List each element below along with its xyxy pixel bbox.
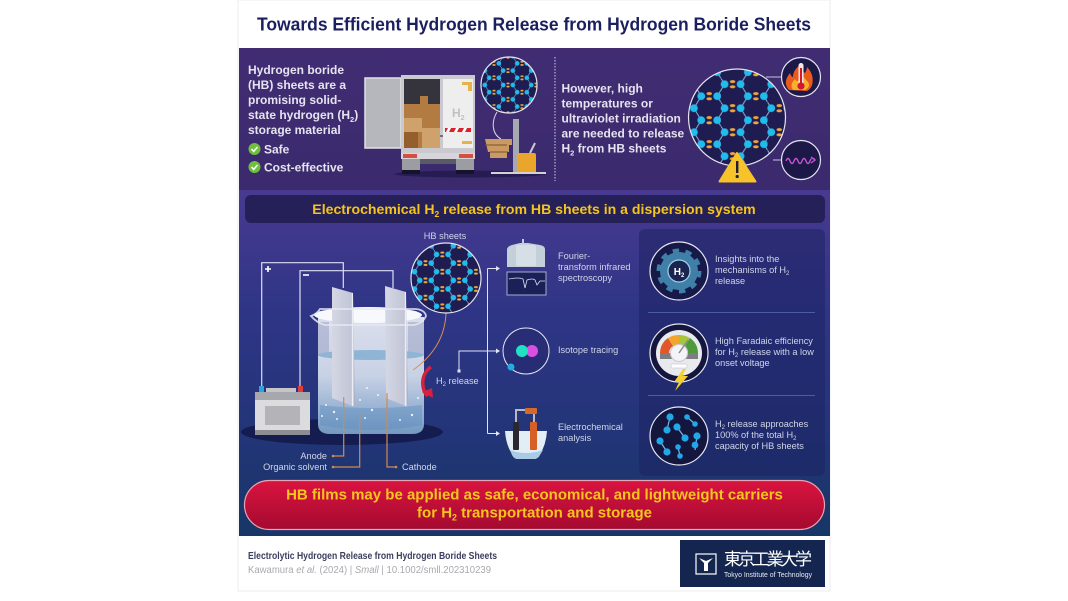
citation: Electrolytic Hydrogen Release from Hydrogen Boride Sheets (248, 551, 497, 562)
icon: warning triangle (720, 153, 756, 182)
label: H2 release: H (436, 376, 443, 386)
divider (648, 312, 815, 314)
text block: release conditions: ultraviolet irradiation (562, 112, 681, 126)
panel: outcomes background (639, 229, 825, 476)
icon: ultraviolet wave (782, 140, 820, 180)
conclusion pill: transportation and storage (457, 504, 652, 522)
outcome: total capacity (650, 407, 809, 465)
citation (248, 551, 497, 576)
icon: FTIR spectrometer (507, 239, 546, 295)
conclusion pill: for H (417, 504, 452, 522)
label: H2 release: release (446, 376, 479, 386)
benefit list (248, 142, 344, 174)
dotted divider (554, 57, 556, 181)
benefit list: Safe (264, 142, 290, 156)
conclusion pill (244, 480, 824, 530)
outcome: Faradaic efficiency: onset voltage (715, 358, 770, 368)
outcome: mechanism insights: mechanisms of H (715, 265, 786, 275)
logo: Tokyo Institute of Technology (680, 540, 825, 587)
benefit list: Cost-effective (264, 160, 344, 174)
text: FTIR: transform infrared (558, 262, 631, 272)
logo: Tokyo Institute of Technology: Tokyo Institute of Technology (724, 572, 812, 579)
panel: HB sheet storage and release problem (239, 48, 830, 190)
text block: release conditions: from HB sheets (574, 142, 667, 156)
electrodes (311, 286, 426, 407)
icon: electrochemical analysis cell (505, 408, 547, 459)
citation: Kawamura et al. (2024) | Small | 10.1002/smll.202310239 (248, 565, 491, 576)
divider (648, 394, 815, 396)
conclusion pill: HB films may be applied as safe, economical, and lightweight carriers (286, 486, 783, 504)
outcome: total capacity: release approaches (725, 419, 809, 429)
connector lines (766, 77, 782, 160)
text: electrochemical analysis: Electrochemical (558, 422, 623, 432)
outcome: mechanism insights (650, 242, 790, 300)
text block: HB storage material: Hydrogen boride (248, 63, 344, 77)
banner heading: 2 (434, 209, 440, 219)
outcome: Faradaic efficiency: release with a low (738, 347, 814, 357)
HB sheet lattice: large (688, 69, 786, 166)
text block: release conditions: However, high (562, 82, 643, 96)
label: HB sheets: HB sheets (424, 231, 467, 241)
battery (255, 386, 310, 435)
outcome: Faradaic efficiency (650, 324, 814, 391)
text block: release conditions: H (562, 142, 570, 156)
text: electrochemical analysis: analysis (558, 433, 592, 443)
text block: HB storage material: 2 (350, 115, 354, 124)
panel: electrochemical release (239, 190, 830, 536)
outcome: mechanism insights: Insights into the (715, 254, 779, 264)
text block: HB storage material: state hydrogen (H (248, 108, 350, 122)
text block: HB storage material: ) (354, 108, 358, 122)
banner heading: Electrochemical H (312, 201, 434, 217)
text block: release conditions: 2 (570, 148, 574, 158)
label: H2 release: 2 (443, 382, 447, 388)
outcome: total capacity: 2 (722, 425, 726, 431)
truck with forklift: 2 (461, 115, 465, 122)
text block: HB storage material: (HB) sheets are a (248, 78, 346, 92)
infographic card (238, 0, 830, 591)
outcome: total capacity: 2 (793, 436, 797, 442)
outcome: mechanism insights: H (674, 267, 681, 278)
outcome: Faradaic efficiency: High Faradaic efficiency (715, 336, 813, 346)
truck with forklift: H (452, 106, 461, 120)
arrow: H2 release (422, 367, 433, 398)
logo: Tokyo Institute of Technology: 東京工業大学 (724, 545, 812, 570)
label: Cathode: Cathode (402, 462, 437, 472)
outcome: total capacity: 100% of the total H (715, 430, 793, 440)
conclusion pill: 2 (452, 512, 457, 522)
text block: release conditions: temperatures or (562, 96, 653, 110)
title: Towards Efficient Hydrogen Release from Hydrogen Boride Sheets (257, 14, 811, 34)
callout lines (332, 393, 397, 468)
outcome: total capacity: capacity of HB sheets (715, 441, 804, 451)
icon: isotope tracing (503, 328, 549, 374)
beaker (314, 307, 424, 434)
outcome: Faradaic efficiency: for H (715, 347, 735, 357)
text: FTIR: spectroscopy (558, 273, 613, 283)
HB sheet lattice: zoomed (411, 243, 481, 370)
banner heading (245, 195, 825, 223)
truck with forklift (365, 75, 546, 178)
text: isotope tracing: Isotope tracing (558, 345, 618, 355)
banner heading: release from HB sheets in a dispersion system (439, 201, 756, 217)
outcome: Faradaic efficiency: 2 (735, 353, 739, 359)
text block: HB storage material: storage material (248, 123, 341, 137)
outcome: mechanism insights: 2 (681, 273, 685, 279)
outcome: mechanism insights: 2 (786, 271, 790, 277)
arrows: analysis branches (458, 266, 500, 436)
icon: thermometer with flames (782, 58, 820, 96)
text block: release conditions: are needed to release (562, 126, 685, 140)
electrolysis setup (241, 263, 443, 468)
text: FTIR: Fourier- (558, 251, 590, 261)
label: Anode: Anode (300, 451, 327, 461)
outcome: total capacity: H (715, 419, 722, 429)
HB sheet lattice: truck (481, 57, 537, 113)
label: Organic solvent: Organic solvent (263, 462, 327, 472)
text block: HB storage material: promising solid- (248, 93, 341, 107)
outcome: mechanism insights: release (715, 276, 745, 286)
